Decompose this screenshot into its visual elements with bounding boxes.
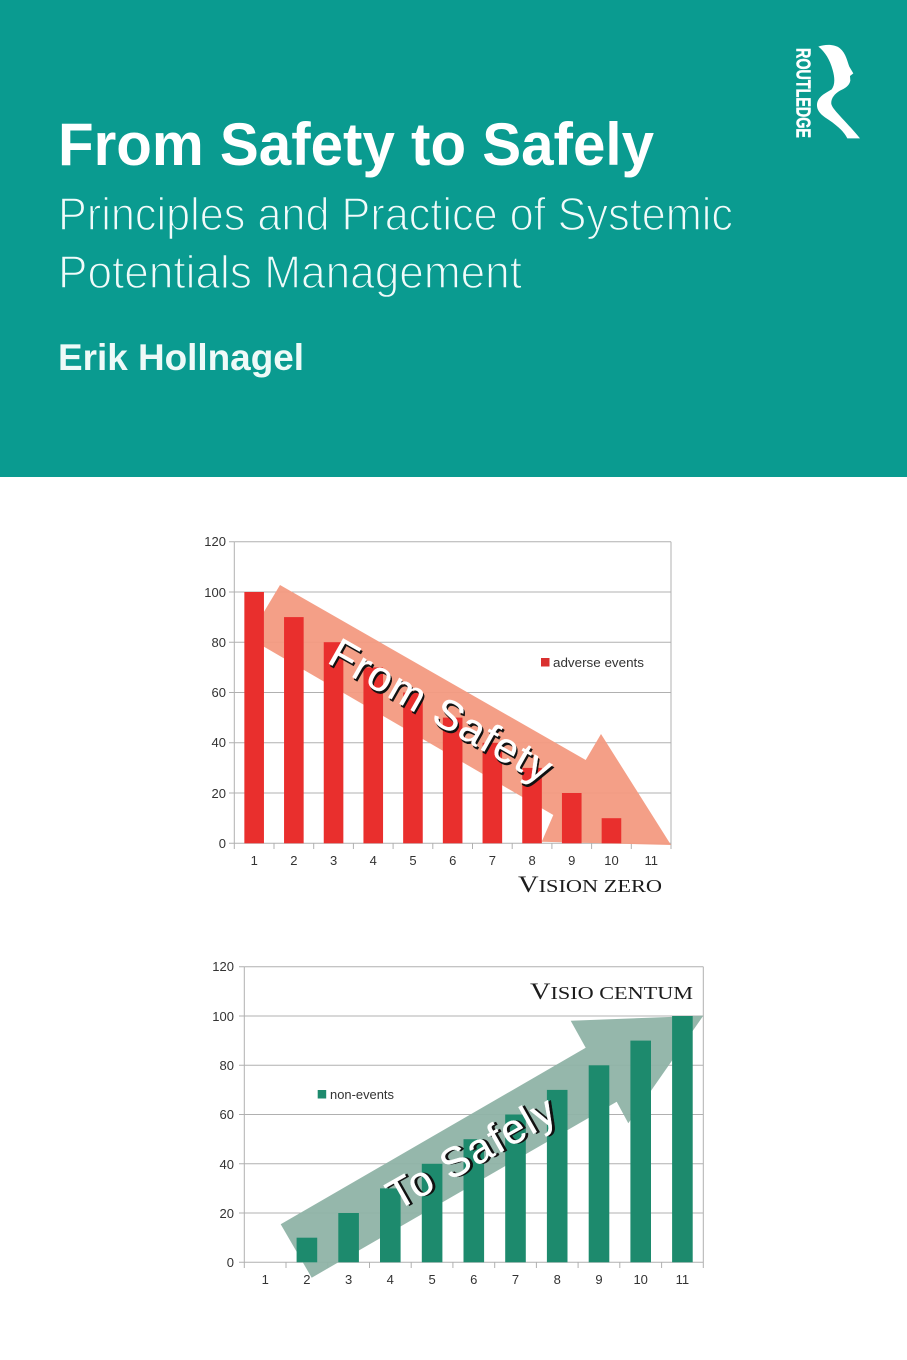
- x axis labels: 4: [387, 1272, 394, 1287]
- x axis labels: 1: [262, 1272, 269, 1287]
- y axis labels: 120: [204, 534, 226, 549]
- subtitle: Potentials Management: [58, 246, 522, 298]
- y axis labels: 60: [220, 1107, 234, 1122]
- header band: [0, 0, 907, 477]
- icon: Routledge logo: ROUTLEDGE: [792, 48, 814, 138]
- y axis labels: 20: [220, 1206, 234, 1221]
- x axis labels: 7: [512, 1272, 519, 1287]
- chart: adverse events: [204, 534, 671, 897]
- y axis labels: 0: [219, 836, 226, 851]
- bars: non-events: [297, 1016, 693, 1262]
- y axis labels: 20: [212, 786, 226, 801]
- y axis labels: 100: [212, 1009, 234, 1024]
- x axis labels: 1: [251, 853, 258, 868]
- icon: Routledge logo: [792, 45, 860, 138]
- y axis labels: 80: [212, 635, 226, 650]
- y axis labels: 40: [220, 1157, 234, 1172]
- x axis labels: 10: [604, 853, 619, 868]
- legend: non-events: non-events: [330, 1087, 394, 1102]
- x axis labels: 8: [554, 1272, 561, 1287]
- arrow label: To Safely: To Safely: [381, 1086, 566, 1219]
- x axis labels: 3: [345, 1272, 352, 1287]
- y axis labels: 100: [204, 585, 226, 600]
- x axis labels: 2: [290, 853, 298, 868]
- x axis labels: 8: [528, 853, 536, 868]
- title: From Safety to Safely: [58, 111, 655, 178]
- y axis labels: 60: [212, 685, 226, 700]
- arrow label: From Safety: From Safety: [322, 629, 561, 792]
- y axis labels: 0: [227, 1255, 234, 1270]
- caption: Visio centum: VISIO CENTUM: [530, 979, 693, 1004]
- x axis labels: 6: [449, 853, 456, 868]
- x axis labels: 7: [489, 853, 496, 868]
- x axis labels: [251, 853, 658, 868]
- caption: Vision zero: VISION ZERO: [518, 872, 662, 897]
- arrow: downward: [264, 585, 671, 845]
- x axis labels: 4: [370, 853, 377, 868]
- y axis labels: 40: [212, 735, 226, 750]
- y axis labels: [204, 534, 226, 851]
- x axis labels: 11: [644, 853, 658, 868]
- arrow label: To Safely: To Safely: [378, 1086, 563, 1219]
- arrow label: From Safety: From Safety: [323, 631, 562, 794]
- x axis labels: [262, 1272, 689, 1287]
- bars: adverse events: [244, 592, 621, 843]
- x axis labels: 6: [470, 1272, 477, 1287]
- x axis labels: 10: [633, 1272, 648, 1287]
- x axis labels: 3: [330, 853, 337, 868]
- author: Erik Hollnagel: [58, 337, 304, 378]
- y axis labels: [212, 959, 234, 1270]
- x axis labels: 11: [676, 1272, 689, 1287]
- y axis labels: 80: [220, 1058, 234, 1073]
- legend: adverse events: adverse events: [553, 655, 645, 670]
- subtitle: Principles and Practice of Systemic: [58, 188, 733, 240]
- x axis labels: 9: [595, 1272, 603, 1287]
- y axis labels: 120: [212, 959, 234, 974]
- x axis labels: 5: [428, 1272, 436, 1287]
- arrow: upward: [281, 1016, 703, 1278]
- chart: non-events: [212, 959, 703, 1287]
- x axis labels: 9: [568, 853, 575, 868]
- x axis labels: 2: [303, 1272, 311, 1287]
- x axis labels: 5: [409, 853, 417, 868]
- subtitle: [58, 188, 733, 298]
